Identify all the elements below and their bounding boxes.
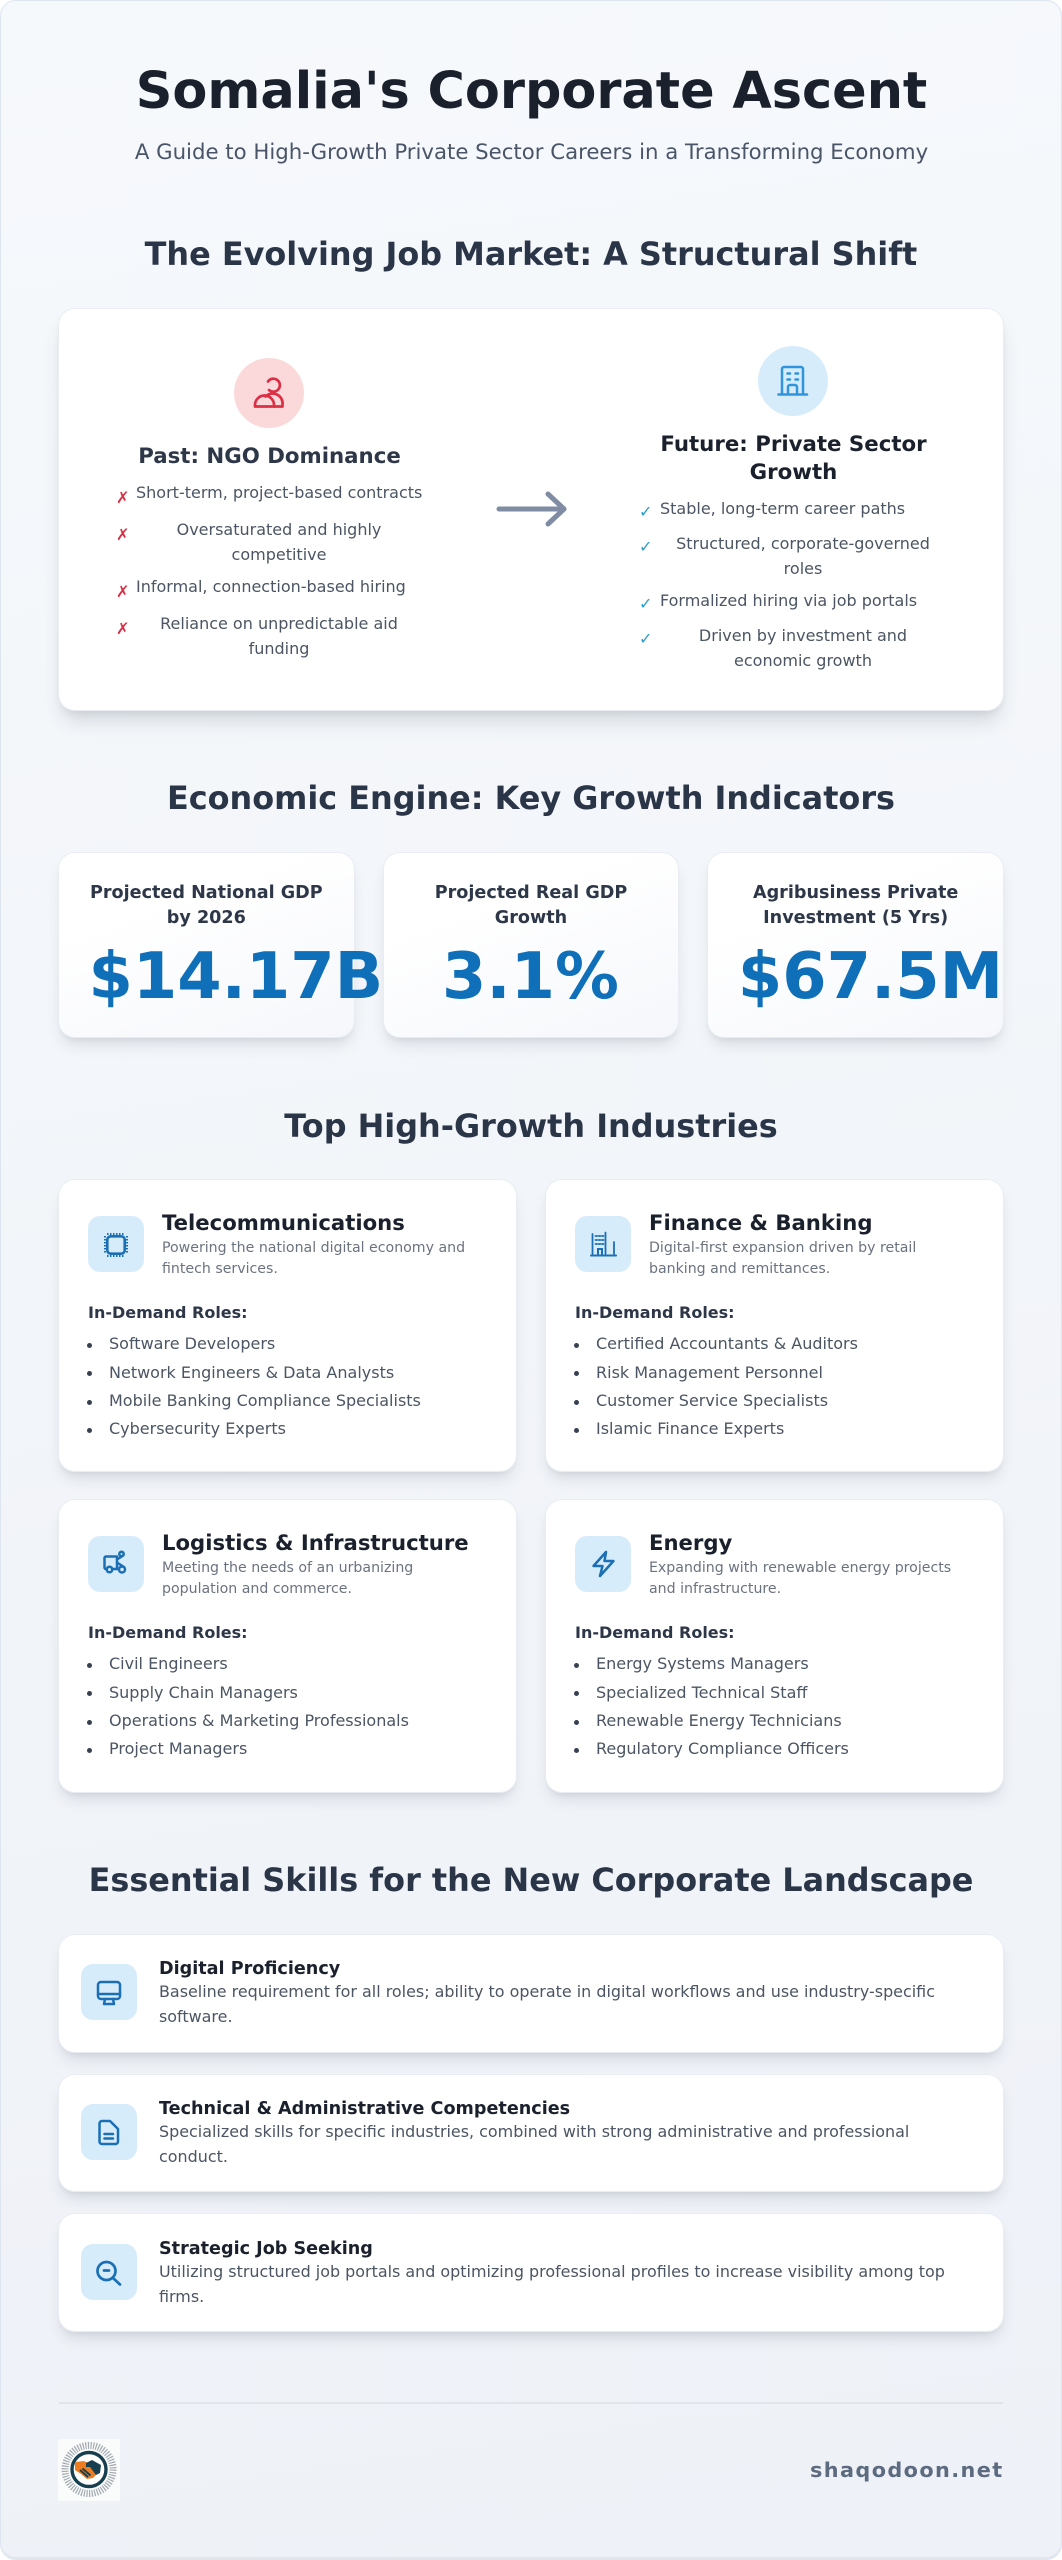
title: Somalia's Corporate Ascent (136, 62, 927, 121)
roles list: Regulatory Compliance Officers (596, 1739, 849, 1758)
panel: telecommunications (59, 1180, 516, 1471)
roles list: Network Engineers & Data Analysts (109, 1363, 394, 1382)
industry name: Telecommunications (162, 1210, 405, 1235)
footer brand text: shaqodoon.net (810, 2458, 1004, 2482)
skill description (159, 2122, 909, 2166)
skill description: software. (159, 2007, 233, 2026)
skill description (159, 2262, 945, 2306)
item: oversaturated: Oversaturated and highly (177, 520, 381, 539)
list: past characteristics (116, 483, 422, 658)
roles heading: In-Demand Roles: (88, 1302, 248, 1322)
industry description: Digital-first expansion driven by retail (649, 1240, 916, 1256)
industry name: Logistics & Infrastructure (162, 1530, 469, 1555)
roles list: Supply Chain Managers (109, 1683, 298, 1702)
roles list: Specialized Technical Staff (596, 1683, 807, 1702)
item: aid funding: funding (249, 639, 309, 658)
industry description: population and commerce. (162, 1581, 352, 1597)
icon: building on blue circle (758, 346, 828, 416)
icon: bank buildings (575, 1216, 631, 1272)
list: future characteristics (639, 499, 930, 670)
industry description: Meeting the needs of an urbanizing (162, 1560, 413, 1576)
subtitle: A Guide to High-Growth Private Sector Careers in a Transforming Economy (135, 140, 928, 165)
stat card: agribusiness investment (708, 853, 1003, 1037)
item: structured roles: Structured, corporate-governed (676, 534, 930, 553)
roles list: Mobile Banking Compliance Specialists (109, 1391, 421, 1410)
cross mark: ✗ (116, 488, 129, 507)
heading: future (660, 432, 927, 485)
check mark: ✓ (639, 502, 652, 521)
panel: strategic job seeking (59, 2214, 1003, 2331)
roles list: Customer Service Specialists (596, 1391, 828, 1410)
skill name: Technical & Administrative Competencies (159, 2098, 570, 2118)
stat card: real GDP growth (384, 853, 678, 1037)
industry description: Expanding with renewable energy projects (649, 1560, 951, 1576)
item: aid funding: Reliance on unpredictable aid (160, 614, 398, 633)
panel: future private sector column (639, 346, 930, 670)
icon: chip (88, 1216, 144, 1272)
roles list: Risk Management Personnel (596, 1363, 823, 1382)
roles list: Renewable Energy Technicians (596, 1711, 842, 1730)
panel: past NGO dominance column (116, 358, 422, 658)
industry description: and infrastructure. (649, 1581, 781, 1597)
icon: truck (88, 1536, 144, 1592)
icon: person on red circle (234, 358, 304, 428)
skill description: conduct. (159, 2147, 228, 2166)
panel: past versus future comparison (59, 309, 1003, 710)
check mark: ✓ (639, 537, 652, 556)
industry description: banking and remittances. (649, 1261, 830, 1277)
icon: lightning bolt (575, 1536, 631, 1592)
roles list: Energy Systems Managers (596, 1654, 809, 1673)
panel: energy (546, 1500, 1003, 1792)
stat label: Projected National GDP (90, 883, 323, 903)
panel: logistics and infrastructure (59, 1500, 516, 1792)
cross mark: ✗ (116, 525, 129, 544)
roles heading: In-Demand Roles: (575, 1302, 735, 1322)
stat label: Investment (5 Yrs) (763, 908, 948, 928)
skill description (159, 1982, 935, 2026)
heading: future: Future: Private Sector (660, 432, 927, 457)
roles list: Software Developers (109, 1334, 275, 1353)
industry description (649, 1560, 951, 1597)
roles list (574, 1654, 849, 1758)
skill description: Baseline requirement for all roles; ability to operate in digital workflows and use industry-specific (159, 1982, 935, 2001)
stat label (753, 883, 958, 928)
icon: magnifier (81, 2244, 137, 2300)
stat value: $14.17B (88, 940, 383, 1014)
roles heading: In-Demand Roles: (88, 1622, 248, 1642)
icon: monitor (81, 1964, 137, 2020)
item: structured roles (676, 534, 930, 578)
item: structured roles: roles (784, 559, 822, 578)
roles heading: In-Demand Roles: (575, 1622, 735, 1642)
industry description: Powering the national digital economy and (162, 1240, 465, 1256)
industry name: Finance & Banking (649, 1210, 872, 1235)
panel: technical and administrative competencies (59, 2075, 1003, 2191)
item: informal hiring: Informal, connection-based hiring (136, 577, 406, 596)
skill description: Utilizing structured job portals and optimizing professional profiles to increase visibility among top (159, 2262, 945, 2281)
item: formalized hiring: Formalized hiring via job portals (660, 591, 917, 610)
heading: essential skills: Essential Skills for the New Corporate Landscape (89, 1861, 973, 1899)
roles list: Operations & Marketing Professionals (109, 1711, 409, 1730)
item: short-term contracts: Short-term, project-based contracts (136, 483, 422, 502)
cross mark: ✗ (116, 582, 129, 601)
roles list: Certified Accountants & Auditors (596, 1334, 858, 1353)
stat card: national GDP (59, 853, 354, 1037)
check mark: ✓ (639, 594, 652, 613)
item: stable paths: Stable, long-term career paths (660, 499, 905, 518)
heading: economic engine: Economic Engine: Key Growth Indicators (167, 779, 895, 817)
stat value: $67.5M (738, 940, 1003, 1014)
panel: digital proficiency (59, 1935, 1003, 2052)
heading: future: Growth (750, 460, 837, 485)
heading: past: Past: NGO Dominance (138, 444, 401, 469)
industry description (649, 1240, 916, 1277)
skill description: Specialized skills for specific industries, combined with strong administrative and professional (159, 2122, 909, 2141)
heading: the evolving job market: The Evolving Job Market: A Structural Shift (145, 235, 917, 273)
item: aid funding (160, 614, 398, 658)
roles list: Civil Engineers (109, 1654, 228, 1673)
icon: document (81, 2104, 137, 2160)
roles list: Project Managers (109, 1739, 247, 1758)
skill description: firms. (159, 2287, 204, 2306)
industry name: Energy (649, 1530, 732, 1555)
stat value: 3.1% (442, 940, 619, 1014)
roles list: Cybersecurity Experts (109, 1419, 286, 1438)
panel: finance and banking (546, 1180, 1003, 1471)
check mark: ✓ (639, 629, 652, 648)
item: oversaturated: competitive (232, 545, 326, 564)
stat label: Projected Real GDP (435, 883, 627, 903)
roles list (574, 1334, 858, 1438)
stat label (90, 883, 323, 928)
heading: top industries: Top High-Growth Industries (284, 1107, 778, 1145)
item: oversaturated (177, 520, 381, 564)
industry description (162, 1240, 465, 1277)
stat label: Growth (495, 908, 567, 928)
roles list: Islamic Finance Experts (596, 1419, 784, 1438)
stat label (435, 883, 627, 928)
item: investment driven: economic growth (734, 651, 872, 670)
item: investment driven: Driven by investment and (699, 626, 907, 645)
stat label: Agribusiness Private (753, 883, 958, 903)
cross mark: ✗ (116, 619, 129, 638)
footer logo: handshake emblem (58, 2439, 120, 2501)
item: investment driven (699, 626, 907, 670)
stat label: by 2026 (167, 908, 246, 928)
industry description (162, 1560, 413, 1597)
roles list (87, 1334, 421, 1438)
roles list (87, 1654, 409, 1758)
industry description: fintech services. (162, 1261, 278, 1277)
arrow: past to future (496, 492, 566, 526)
skill name: Digital Proficiency (159, 1958, 340, 1978)
skill name: Strategic Job Seeking (159, 2238, 373, 2258)
